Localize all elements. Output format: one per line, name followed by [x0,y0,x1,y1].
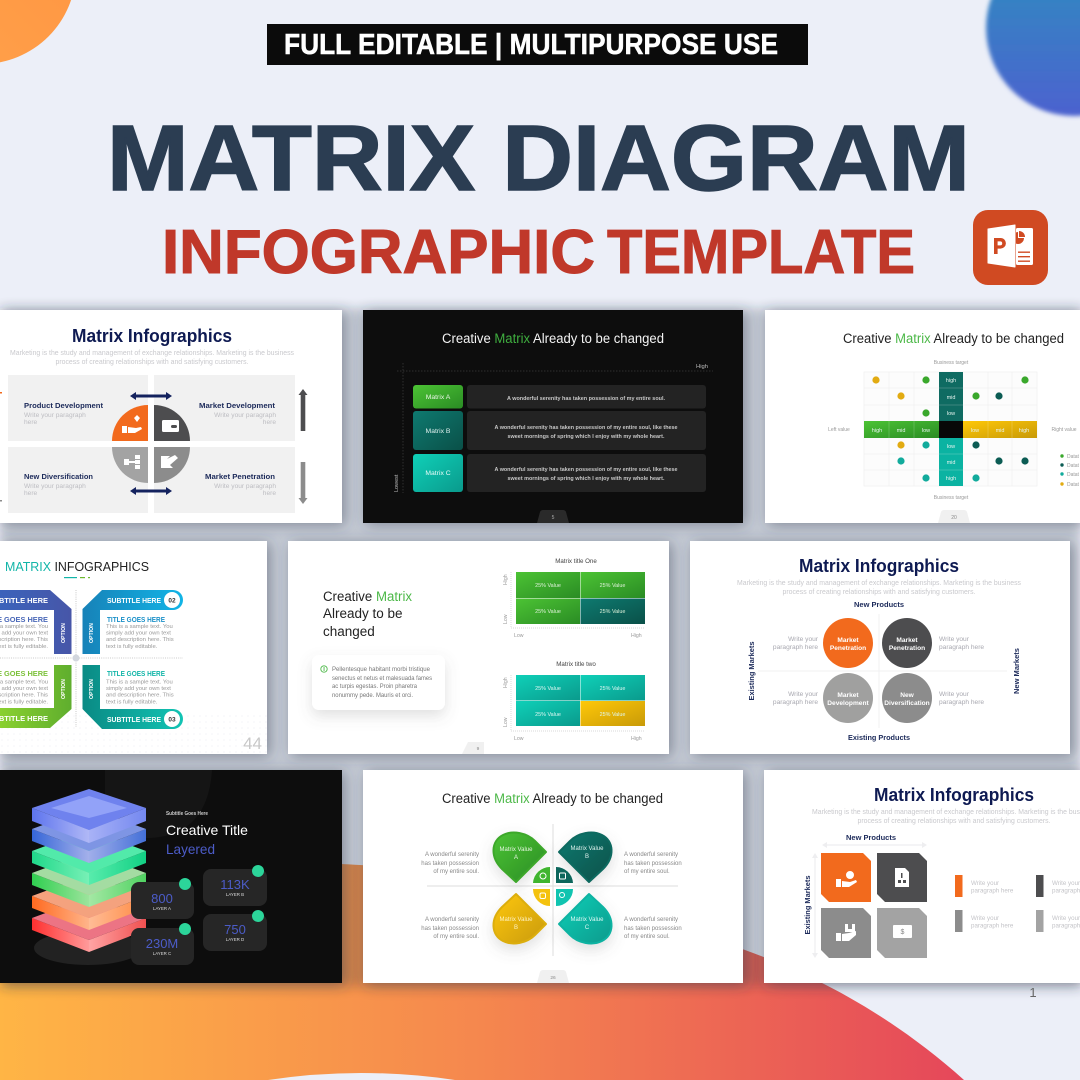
panel: option corner shapes slide [0,541,267,754]
grid centre column and row: low [922,428,930,434]
text blocks: paragraphs [773,636,984,706]
legend: Datat [1067,482,1080,488]
stat: 800 Layer A [131,878,194,919]
legend: Datat [1067,463,1080,469]
layered stack [32,789,146,952]
panel: petal matrix slide [363,770,743,983]
grid centre column and row [864,372,1037,486]
text block: title: Creative Title [166,822,248,838]
text block: bottom right: and description here. This [106,692,174,698]
axis labels [747,600,1021,742]
row: Matrix C: sweet mornings of spring which I enjoy with my whole heart. [508,476,665,482]
text block: bottom right [106,669,174,706]
corner shape: teal 03 [82,665,183,729]
axis labels: Left value [828,427,850,433]
axis label: High: High [696,364,708,370]
petal: Matrix Value A: A [514,855,518,861]
text block: Market Penetration: here [263,490,276,497]
legend: gray [955,910,1014,932]
page tab [537,510,569,523]
corner shape: teal 03: SUBTITLE HERE [107,715,161,724]
corner shape: blue 02: SUBTITLE HERE [107,596,161,605]
text blocks: paragraphs: has taken possession [624,861,682,867]
callout card: Pellentesque habitant morbi tristique [332,666,431,673]
axis centre [72,654,80,662]
axis labels: New Markets [1012,648,1021,694]
legend: Datat [1067,454,1080,460]
circle: New Diversification: New [900,692,915,699]
text block: Market Development: Market Development [199,401,276,410]
legend: orange: Write your [971,880,999,887]
corner shape: blue [0,590,72,654]
chart: Matrix title two: Low [514,736,524,742]
text blocks: paragraphs: of my entire soul. [433,869,479,875]
grid centre column and row: high [946,378,956,384]
pie quadrants with icons [112,405,190,483]
page tab: 5 [552,515,555,521]
axes [758,614,1007,728]
text block: Product Development: Product Development [24,401,104,410]
stack shadow [34,931,142,965]
text block: bottom right: simply add your own text [106,686,171,692]
chart: Matrix title One: Low [514,633,524,639]
chart: Matrix title two: 25% Value [600,686,625,692]
quarter icons [533,867,573,906]
text block: intro [812,807,1080,825]
text block: bottom right: text is fully editable. [106,700,158,706]
text block: intro [10,348,294,366]
stat: 230M Layer C: LAYER C [153,951,171,956]
legend: dark: Write your [1052,880,1080,887]
text block: Market Penetration: Market Penetration [205,472,275,481]
text block: intro: Marketing is the study and management of exchange relationships. Marketing is the business [10,348,294,357]
stat: 800 Layer A: 800 [151,891,173,906]
axis label: Lowest: Lowest [394,474,400,492]
page tab: 20 [951,515,957,521]
stat: 113K Layer B: LAYER B [226,892,244,897]
chart: Matrix title One: 25% Value [600,583,625,589]
grid [864,372,1037,486]
row: Matrix B [413,411,706,450]
legend: gray: Write your [971,915,999,922]
legend: dark [1036,875,1080,897]
arrow: up [298,389,308,431]
legend: orange [955,875,1014,897]
petal: Matrix Value A: Matrix Value [500,847,533,853]
grid centre column and row: low [947,411,955,417]
row: Matrix C [413,454,706,492]
axis labels: Existing Products [848,733,910,742]
grid centre column and row: high [1019,428,1029,434]
grid centre column and row: mid [947,395,955,401]
subtitle: Infographic Template: INFOGRAPHIC [162,218,595,287]
page number: 1 [1029,985,1037,1000]
circle: Market Development [823,673,873,723]
callout card: nonummy pede. Mauris et orci. [332,692,413,699]
grid centre column and row: low [971,428,979,434]
text block: Product Development: here [24,419,38,426]
heading: Matrix Infographics [799,556,959,576]
petal: Matrix Value C [559,894,612,943]
petal: Matrix Value B yellow: B [514,925,518,931]
text block: top right: simply add your own text [106,630,171,636]
heading: Matrix Infographics [72,326,232,346]
stat: 113K Layer B: 113K [220,877,250,892]
text blocks: paragraphs: paragraph here [939,699,984,706]
text blocks: paragraphs: has taken possession [624,926,682,932]
text block: Market Penetration: Write your paragraph [214,483,276,490]
text blocks: paragraphs: A wonderful serenity [624,917,678,923]
circle: Market Penetration dark: Penetration [889,645,925,652]
text blocks: paragraphs: Write your [788,636,819,643]
layer: periwinkle [32,789,146,843]
stat: 230M Layer C [131,923,194,965]
panel: two charts slide [288,541,669,754]
text block: intro: Marketing is the study and management of exchange relationships. Marketing is the business [737,578,1021,587]
chart: Matrix title two: Matrix title two [556,661,596,668]
axis label: New Products: New Products [846,833,896,842]
subtle background shape [105,770,212,838]
callout card [312,655,445,710]
petal: Matrix Value B: B [585,854,589,860]
stat: 113K Layer B [203,865,267,906]
heading: Already to be [323,606,403,621]
shadow band behind slide grid [0,308,1080,987]
text block: intro: process of creating relationships with and satisfying customers. [858,816,1050,825]
corner shape: blue: OPTION [61,623,67,643]
circle: Market Penetration orange: Market [837,637,859,644]
legend: light gray [1036,910,1080,932]
page tab [938,510,970,523]
grid centre column and row: high [872,428,882,434]
chart: Matrix title One: High [631,633,642,639]
page tab [537,970,569,983]
corner shape: teal 03: 03 [168,716,176,724]
petal: Matrix Value B: Matrix Value [571,846,604,852]
grid centre column and row: mid [947,460,955,466]
background blob: top-right blue [986,0,1080,116]
text block: title [166,811,248,857]
banner: FULL EDITABLE | MULTIPURPOSE USE [284,29,778,61]
chart: Matrix title two [503,661,645,742]
text block: Product Development [24,401,104,426]
text block: bottom right: TITLE GOES HERE [107,669,165,678]
text block: top left [0,615,48,650]
page number: 44 [243,734,262,753]
stat: 750 Layer D: 750 [224,922,246,937]
corner shape: teal 03: OPTION [89,679,95,699]
text blocks: paragraphs: A wonderful serenity [425,852,479,858]
petal: Matrix Value B [559,833,612,882]
axes [0,590,183,727]
axis labels: New Products [854,600,904,609]
layer: green [32,852,146,907]
square: orange [821,853,871,902]
text block: intro: process of creating relationships with and satisfying customers. [782,587,976,596]
page tab [462,742,484,754]
page tab: 26 [550,975,556,981]
legend: gray: paragraph here [971,922,1014,930]
subtitle: Infographic Template: TEMPLATE [607,218,915,287]
text block: Market Development [199,401,276,426]
text blocks: paragraphs: A wonderful serenity [624,852,678,858]
corner shape: green: OPTION [61,679,67,699]
text blocks: paragraphs: has taken possession [421,926,479,932]
arrow: vertical [812,853,818,958]
layer: red [32,897,146,952]
circle: Market Development: Development [827,700,870,707]
text block: Market Development: here [263,419,276,426]
stat: 750 Layer D: LAYER D [226,937,244,942]
stat: 800 Layer A: LAYER A [153,906,171,911]
chart: Matrix title two: 25% Value [535,686,561,692]
layer: orange [32,875,146,930]
subtitle: Infographic Template [162,218,915,287]
text blocks: paragraphs: paragraph here [939,644,984,651]
panel: dark list matrix slide [363,310,743,523]
text block: top right [106,615,174,650]
row: Matrix C: A wonderful serenity has taken possession of my entire soul, like these [494,467,678,473]
corner shape: blue 02 [82,590,183,654]
text blocks: paragraphs: Write your [939,636,970,643]
heading [323,589,412,639]
square: light gray: $ [901,929,905,936]
title: Matrix Diagram: MATRIX DIAGRAM [107,106,970,210]
text block: intro: process of creating relationships with and satisfying customers. [56,357,248,366]
legend: Datat [1067,472,1080,478]
chart: Matrix title One: 25% Value [535,583,561,589]
panel: four-quadrant pie slide [0,310,342,523]
text block: New Diversification: New Diversification [24,472,93,481]
circle: New Diversification [882,673,932,723]
heading: MATRIX INFOGRAPHICS [5,559,149,574]
heading underline [64,577,90,578]
row: Matrix C: Matrix C [425,470,451,477]
text block: top right: This is a sample text. You [106,624,173,630]
circle: Market Penetration dark: Market [896,637,918,644]
legend [1060,454,1080,488]
background blob: bottom gradient [0,858,964,1080]
row: Matrix B: sweet mornings of spring which I enjoy with my whole heart. [508,434,665,440]
axis label: Existing Markets: Existing Markets [803,876,812,934]
stat: 750 Layer D [203,910,267,951]
arrow: horizontal [822,842,927,848]
petal: Matrix Value C: C [585,925,590,931]
corner shape: green [0,665,72,728]
chart: Matrix title two: High [503,677,509,688]
panel: layered stack slide [0,770,342,983]
circle: Market Penetration dark [882,618,932,668]
square: light gray [877,908,927,958]
data dots [872,376,1029,482]
chart: Matrix title two: 25% Value [535,712,561,718]
heading: Creative Matrix [323,589,412,604]
chart axes [397,363,713,493]
axes [427,824,678,956]
heading: changed [323,624,375,639]
text block: intro [737,578,1021,596]
chart: Matrix title One: Matrix title One [555,558,597,565]
row: Matrix B: A wonderful serenity has taken possession of my entire soul, like these [494,425,678,431]
corner shape: blue 02: OPTION [89,623,95,643]
text block: Product Development: Write your paragraph [24,412,86,419]
text block: New Diversification: Write your paragraph [24,483,86,490]
text block: New Diversification: here [24,490,38,497]
text block: bottom left [0,669,48,706]
grid centre column and row: mid [996,428,1004,434]
text block: top right: text is fully editable. [106,644,158,650]
heading: Creative Matrix Already to be changed [442,331,664,346]
chart: Matrix title One: Low [503,614,509,624]
callout card: senectus et netus et malesuada fames [332,675,432,682]
grid centre column and row: mid [897,428,905,434]
petal: Matrix Value C: Matrix Value [571,917,604,923]
row: Matrix B: Matrix B [426,428,451,435]
grid centre column and row: low [947,444,955,450]
arrow: bottom horizontal [130,487,172,495]
heading: Creative Matrix Already to be changed [843,331,1064,346]
callout card: ac turpis egestas. Proin pharetra [332,683,418,690]
stat: 230M Layer C: 230M [146,936,178,951]
background cutout: bottom ellipse [268,1073,455,1080]
legend: light gray: Write your [1052,915,1080,922]
square: dark [877,853,927,902]
text blocks: paragraphs: Write your [939,691,970,698]
arrow: down [298,462,308,504]
text block: Market Penetration [205,472,276,497]
background blob: top-left orange [0,0,76,64]
grid centre column and row: high [946,476,956,482]
text block: title: Subtitle Goes Here [166,811,208,817]
heading: Matrix Infographics [874,785,1034,805]
circle: Market Development: Market [837,692,859,699]
row: Matrix A [413,385,706,408]
text blocks: paragraphs: has taken possession [421,861,479,867]
text block: Market Development: Write your paragraph [214,412,276,419]
axis labels: Business target [934,495,969,501]
panel: chamfered squares slide [764,770,1080,983]
heading: Creative Matrix Already to be changed [442,791,663,806]
square: gray [821,908,871,958]
row: Matrix A: Matrix A [426,394,451,401]
panel: cross grid matrix slide [765,310,1080,523]
chart: Matrix title One: 25% Value [600,609,625,615]
axis labels: Existing Markets [747,642,756,700]
petal: Matrix Value B yellow [493,894,546,943]
text block: top right: and description here. This [106,637,174,643]
text blocks: paragraphs: Write your [788,691,819,698]
icon: PowerPoint [973,210,1048,285]
text block: bottom right: This is a sample text. You [106,680,173,686]
row: Matrix A: A wonderful serenity has taken possession of my entire soul. [507,396,665,402]
circle: Market Penetration orange [823,618,873,668]
layer: blue [32,808,146,863]
corner shape: blue 02: 02 [168,598,176,604]
text blocks: paragraphs: of my entire soul. [433,934,479,940]
chart: Matrix title two: Low [503,717,509,727]
panel: four circles slide [690,541,1070,754]
chart: Matrix title two: High [631,736,642,742]
edge marks [0,392,2,502]
page tab: 9 [477,746,480,752]
text blocks: paragraphs [421,852,682,940]
circle: New Diversification: Diversification [884,700,930,707]
text blocks: paragraphs: of my entire soul. [624,869,670,875]
petal: Matrix Value B yellow: Matrix Value [500,917,533,923]
text blocks: paragraphs: of my entire soul. [624,934,670,940]
chart: Matrix title One: 25% Value [535,609,561,615]
quadrant panels [8,375,295,513]
text block: New Diversification [24,472,93,497]
text block: top right: TITLE GOES HERE [107,615,165,624]
circle: Market Penetration orange: Penetration [830,645,866,652]
axis labels: Right value [1051,427,1077,433]
text blocks: paragraphs: paragraph here [773,644,818,651]
legend: orange: paragraph here [971,888,1014,894]
axis labels [828,360,1077,501]
text blocks: paragraphs: A wonderful serenity [425,917,479,923]
petal: Matrix Value A [493,833,546,882]
layer: mint [32,830,146,885]
chart: Matrix title One: High [503,574,509,585]
text blocks: paragraphs: paragraph here [773,699,818,706]
chart: Matrix title One [503,558,645,639]
arrow: top horizontal [130,392,172,400]
axis labels: Business target [934,360,969,366]
chart: Matrix title two: 25% Value [600,712,625,718]
text block: title: Layered [166,841,215,857]
background dot pattern [0,712,267,754]
